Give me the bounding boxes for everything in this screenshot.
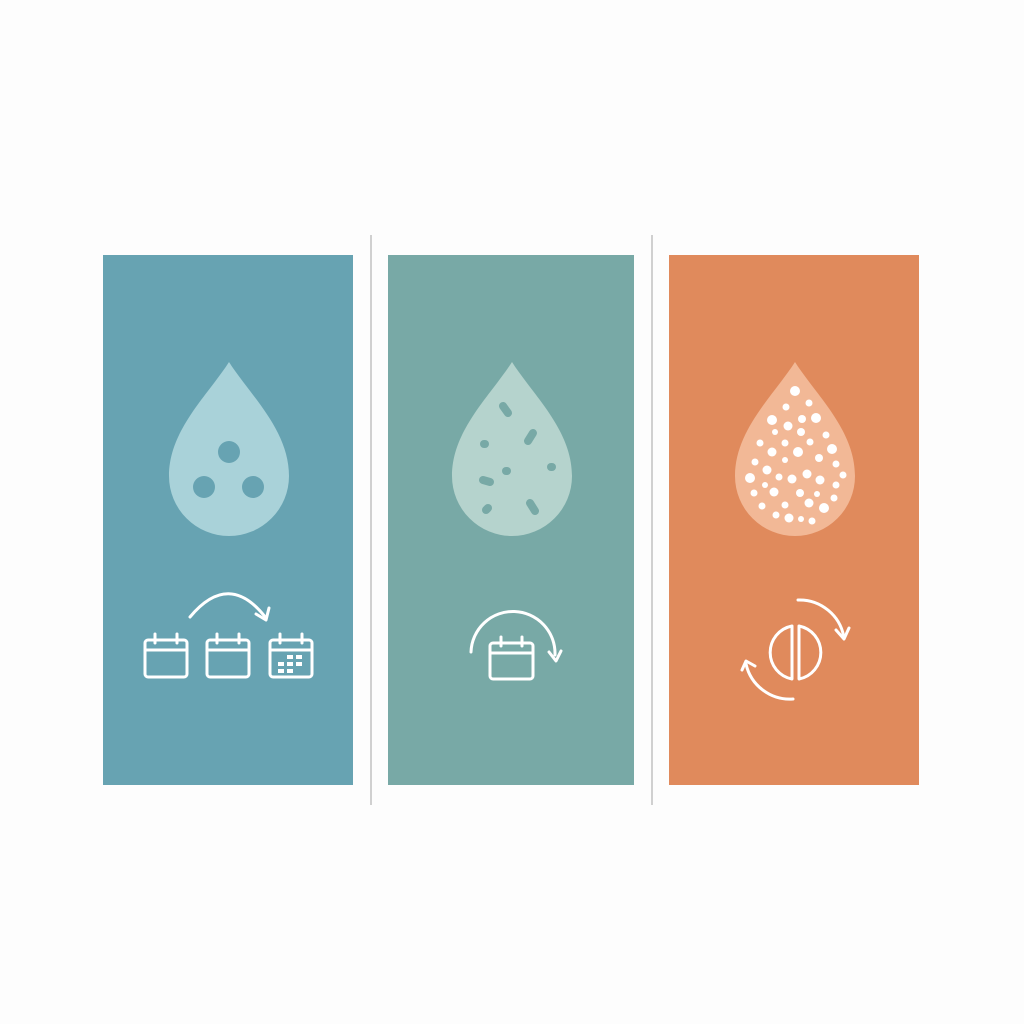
icon: drop with three dots (169, 362, 289, 536)
icon: drop with many dots (735, 362, 855, 536)
icon: drop with particles (452, 362, 572, 536)
panel: teal (388, 255, 634, 785)
panel: blue (103, 255, 353, 785)
panel: orange (669, 255, 919, 785)
icon: calendars with arrow (145, 594, 312, 677)
icon: calendar with circular arrow (471, 611, 561, 679)
icon: split pill with cycle arrows (742, 600, 849, 699)
